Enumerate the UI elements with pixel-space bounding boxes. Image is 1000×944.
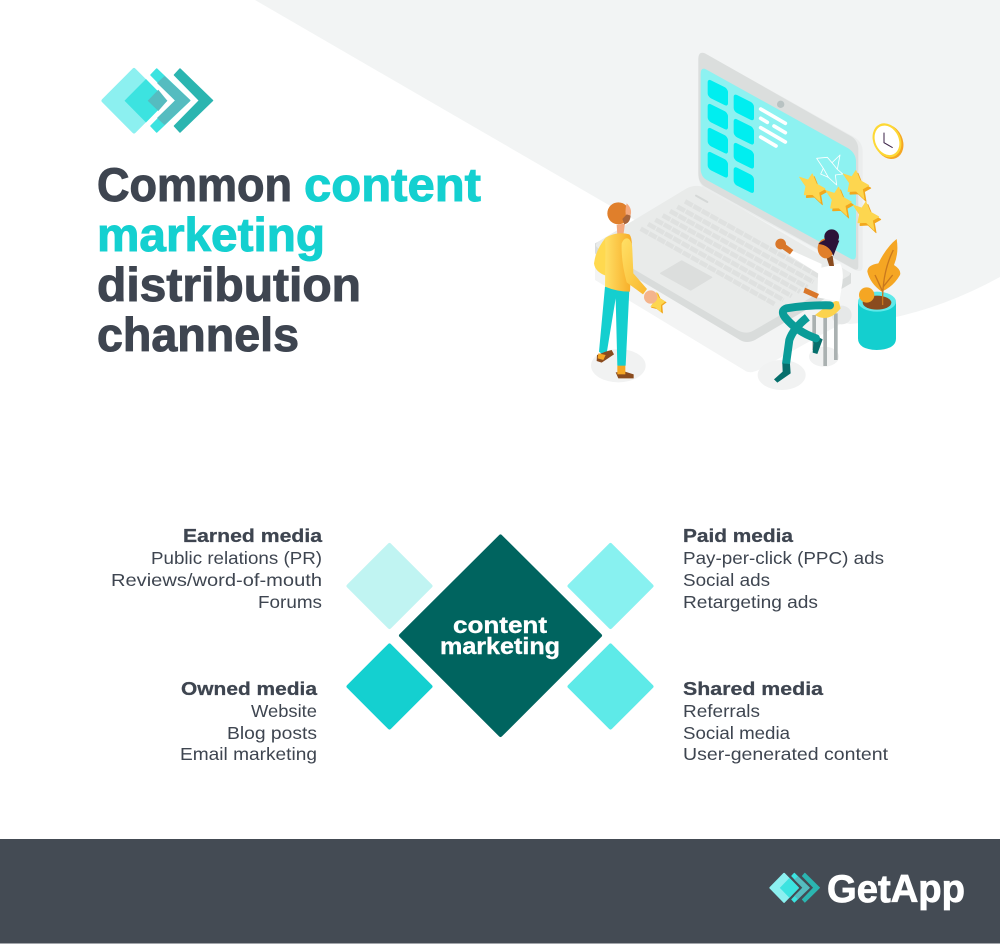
shoes	[597, 350, 614, 363]
floor shadow	[595, 207, 857, 372]
front arm	[622, 238, 647, 294]
title: channels	[97, 308, 299, 361]
legs	[599, 287, 629, 367]
outline star	[817, 155, 843, 185]
plant	[858, 239, 900, 350]
title: content	[304, 158, 481, 211]
neck	[617, 223, 625, 236]
star in hand	[651, 292, 667, 314]
diagram: centre diamond: content	[453, 612, 547, 638]
diagram: centre diamond	[401, 536, 600, 735]
text: earned media: Earned media	[183, 526, 323, 546]
base shadow	[832, 306, 852, 324]
text: paid media: Paid media	[683, 526, 794, 546]
title: distribution	[97, 258, 361, 311]
text: shared media: Social media	[683, 723, 790, 743]
text lines	[761, 109, 785, 146]
text: paid media: Social ads	[683, 570, 770, 590]
title: Common	[97, 158, 292, 211]
text: owned media: Owned media	[181, 679, 318, 699]
diamond: owned	[348, 646, 430, 728]
title: marketing	[97, 208, 325, 261]
app tiles	[708, 79, 754, 194]
background shape	[255, 0, 1000, 324]
footer logo	[770, 873, 820, 902]
text: earned media: Forums	[258, 592, 322, 612]
text: shared media: User-generated content	[683, 744, 888, 764]
trackpad	[661, 261, 712, 290]
laptop screen	[698, 53, 863, 271]
person standing	[591, 202, 667, 382]
text: owned media: Website	[251, 701, 317, 721]
torso	[605, 233, 632, 292]
neck and head	[826, 256, 834, 266]
text: owned media: Blog posts	[227, 723, 317, 743]
text: owned media: Email marketing	[180, 744, 317, 764]
text: paid media	[683, 526, 884, 612]
near shoe	[774, 363, 791, 383]
footer wordmark: GetApp	[827, 868, 965, 911]
text: paid media: Pay-per-click (PPC) ads	[683, 548, 884, 568]
clock	[867, 119, 909, 164]
legs	[783, 305, 830, 338]
diamond: earned	[348, 545, 430, 627]
text: shared media: Shared media	[683, 679, 824, 699]
diagram: centre diamond: marketing	[440, 633, 560, 659]
footer	[0, 839, 1000, 944]
text: shared media	[683, 679, 888, 764]
hand	[780, 243, 793, 254]
illustration: laptop and people	[591, 53, 909, 390]
keyboard	[641, 201, 818, 304]
text: paid media: Retargeting ads	[683, 592, 818, 612]
person seated	[758, 229, 843, 390]
text: owned media	[180, 679, 318, 764]
stars	[800, 165, 881, 235]
torso and arm	[817, 263, 843, 302]
text: earned media: Reviews/word-of-mouth	[111, 570, 322, 590]
text: earned media: Public relations (PR)	[151, 548, 322, 568]
far foot	[812, 333, 823, 354]
back arm	[594, 238, 606, 276]
text: earned media	[111, 526, 323, 612]
laptop base	[595, 186, 851, 342]
head	[607, 202, 629, 224]
diamond: shared	[570, 646, 652, 728]
diamond: paid	[570, 545, 652, 627]
text: shared media: Referrals	[683, 701, 760, 721]
stool	[812, 313, 838, 366]
logo: diamonds	[104, 69, 212, 132]
title	[97, 158, 481, 361]
